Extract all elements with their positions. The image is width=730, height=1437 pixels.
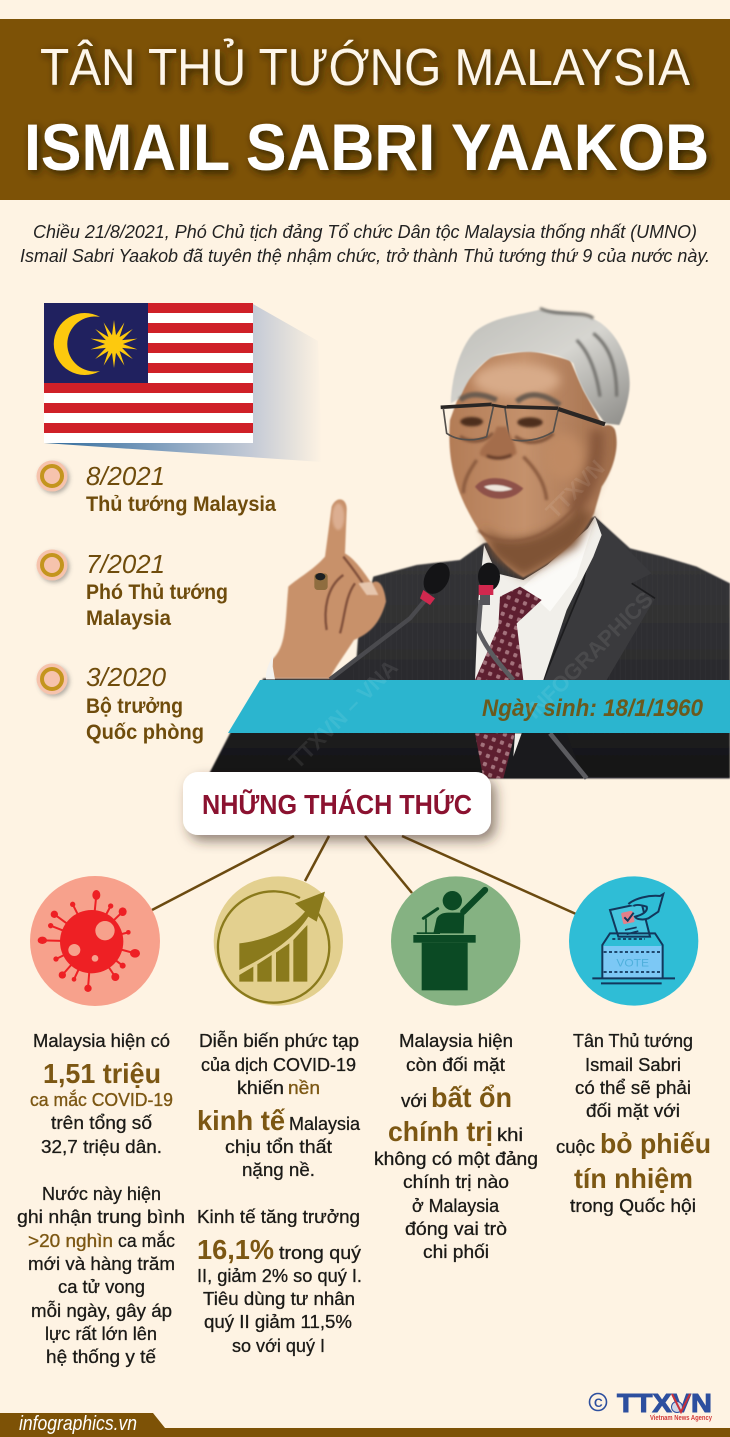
tie xyxy=(475,587,542,680)
shirt xyxy=(475,517,602,680)
nose xyxy=(463,427,547,500)
portrait photo illustration xyxy=(207,308,730,778)
column 2 text: economy: nặng nề. xyxy=(242,1159,315,1180)
column 2 text: economy: Diễn biến phức tạp xyxy=(199,1030,359,1051)
hair xyxy=(451,310,630,425)
intro text: Chiều 21/8/2021, Phó Chủ tịch đảng Tổ chức Dân tộc Malaysia thống nhất (UMNO) xyxy=(33,221,697,242)
column 4 text: confidence vote xyxy=(556,1030,711,1216)
heading pill xyxy=(183,772,491,835)
title line 1: TÂN THỦ TƯỚNG MALAYSIA xyxy=(40,38,690,97)
column 2 text: economy: II, giảm 2% so quý I. xyxy=(197,1265,362,1286)
milestone 7/2021: Malaysia xyxy=(86,607,171,630)
column 4 text: confidence vote: bỏ phiếu xyxy=(600,1128,711,1159)
column 3 text: politics: chính trị nào xyxy=(403,1171,509,1192)
column 1 text: COVID-19: ca mắc COVID-19 xyxy=(30,1089,173,1110)
column 1 text: COVID-19: >20 nghìn xyxy=(28,1230,113,1251)
column 3 text: politics: ở Malaysia xyxy=(412,1195,500,1216)
column 1 text: COVID-19: hệ thống y tế xyxy=(46,1346,157,1367)
column 1 text: COVID-19: ca mắc xyxy=(118,1230,175,1251)
logo: copyright TTXVN: Vietnam News Agency xyxy=(650,1413,713,1422)
column 3 text: politics: đóng vai trò xyxy=(405,1218,507,1239)
mouth xyxy=(475,478,523,499)
column 1 text: COVID-19: 32,7 triệu dân. xyxy=(41,1136,162,1157)
column 4 text: confidence vote: có thể sẽ phải xyxy=(575,1077,691,1098)
glasses xyxy=(441,404,605,441)
column 3 text: politics: với xyxy=(401,1090,427,1111)
icon: speaker at podium xyxy=(391,876,520,1006)
column 3 text: politics: chi phối xyxy=(423,1241,489,1262)
lapel xyxy=(543,517,655,680)
column 4 text: confidence vote: cuộc xyxy=(556,1136,595,1157)
header band with title xyxy=(0,19,730,200)
hand xyxy=(272,499,386,678)
connector lines xyxy=(152,836,576,914)
column 2 text: economy: của dịch COVID-19 xyxy=(201,1054,356,1075)
milestone 3/2020: 3/2020 xyxy=(86,662,167,692)
intro text: Ismail Sabri Yaakob đã tuyên thệ nhậm chức, trở thành Thủ tướng thứ 9 của nước này. xyxy=(20,245,710,266)
footer band xyxy=(0,1413,730,1437)
column 2 text: economy: so với quý I xyxy=(232,1335,325,1356)
logo: copyright TTXVN xyxy=(590,1388,713,1422)
watermarks: TTXVN – VNA xyxy=(284,655,403,774)
milestone 3/2020: Bộ trưởng xyxy=(86,695,183,718)
column 2 text: economy: khiến xyxy=(237,1077,284,1098)
column 3 text: politics: Malaysia hiện xyxy=(399,1030,513,1051)
intro text xyxy=(20,221,710,266)
column 2 text: economy: quý II giảm 11,5% xyxy=(204,1311,352,1332)
column 2 text: economy: Tiêu dùng tư nhân xyxy=(203,1288,355,1309)
footer band: infographics.vn xyxy=(19,1413,137,1435)
milestone 7/2021 xyxy=(36,549,228,630)
Malaysian flag with shadow xyxy=(44,303,322,462)
column 1 text: COVID-19: Nước này hiện xyxy=(42,1183,161,1204)
column 3 text: politics: chính trị xyxy=(388,1116,493,1147)
column 2 text: economy: Kinh tế tăng trưởng xyxy=(197,1206,360,1227)
column 1 text: COVID-19: Malaysia hiện có xyxy=(33,1030,170,1051)
column 4 text: confidence vote: tín nhiệm xyxy=(574,1163,693,1194)
icon: virus xyxy=(30,876,160,1006)
column 2 text: economy: kinh tế xyxy=(197,1105,285,1136)
column 2 text: economy xyxy=(197,1030,362,1356)
watermarks: INFOGRAPHICS xyxy=(521,587,658,724)
cuff xyxy=(266,655,275,679)
column 3 text: politics: không có một đảng xyxy=(374,1148,538,1169)
column 2 text: economy: chịu tổn thất xyxy=(225,1136,332,1157)
ring xyxy=(314,573,328,590)
microphones xyxy=(330,558,587,778)
column 1 text: COVID-19: mỗi ngày, gây áp xyxy=(31,1300,172,1321)
milestone 8/2021 xyxy=(36,460,276,516)
milestone 7/2021: 7/2021 xyxy=(86,549,165,579)
column 2 text: economy: 16,1% xyxy=(197,1234,274,1265)
watermarks xyxy=(284,455,658,774)
heading pill: NHỮNG THÁCH THỨC xyxy=(202,789,472,820)
milestone 7/2021: Phó Thủ tướng xyxy=(86,581,228,604)
column 1 text: COVID-19 xyxy=(17,1030,185,1367)
eyebrows and eyes xyxy=(460,395,560,442)
neck and face xyxy=(449,350,617,577)
milestone 8/2021: 8/2021 xyxy=(86,461,165,491)
icon: ballot box: VOTE xyxy=(616,957,649,969)
column 3 text: politics xyxy=(374,1030,538,1262)
column 4 text: confidence vote: Ismail Sabri xyxy=(585,1054,681,1075)
column 1 text: COVID-19: lực rất lớn lên xyxy=(45,1323,157,1344)
column 3 text: politics: bất ổn xyxy=(431,1082,512,1113)
column 1 text: COVID-19: trên tổng số xyxy=(51,1112,152,1133)
column 1 text: COVID-19: ca tử vong xyxy=(58,1276,145,1297)
birth date ribbon xyxy=(228,680,730,733)
column 4 text: confidence vote: trong Quốc hội xyxy=(570,1195,696,1216)
column 1 text: COVID-19: ghi nhận trung bình xyxy=(17,1206,185,1227)
milestone 3/2020: Quốc phòng xyxy=(86,721,204,744)
column 3 text: politics: khi xyxy=(497,1124,523,1145)
column 4 text: confidence vote: đối mặt với xyxy=(586,1100,680,1121)
column 4 text: confidence vote: Tân Thủ tướng xyxy=(573,1030,693,1051)
column 1 text: COVID-19: 1,51 triệu xyxy=(43,1058,161,1089)
column 1 text: COVID-19: mới và hàng trăm xyxy=(28,1253,175,1274)
column 2 text: economy: trong quý xyxy=(279,1242,362,1263)
column 2 text: economy: Malaysia xyxy=(289,1113,361,1134)
icon: ballot box xyxy=(569,876,698,1006)
suit xyxy=(207,517,730,778)
facial shading xyxy=(473,363,604,577)
icon: growth chart xyxy=(214,876,343,1006)
watermarks: TTXVN xyxy=(541,455,610,524)
birth date ribbon: Ngày sinh: 18/1/1960 xyxy=(482,695,704,722)
logo: copyright TTXVN: C xyxy=(594,1396,603,1410)
logo: copyright TTXVN: TTXVN xyxy=(617,1388,712,1418)
milestone 8/2021: Thủ tướng Malaysia xyxy=(86,493,276,516)
column 2 text: economy: nền xyxy=(288,1077,320,1098)
milestone 3/2020 xyxy=(36,662,204,744)
column 3 text: politics: còn đối mặt xyxy=(406,1054,505,1075)
timeline: career milestones xyxy=(36,460,276,744)
